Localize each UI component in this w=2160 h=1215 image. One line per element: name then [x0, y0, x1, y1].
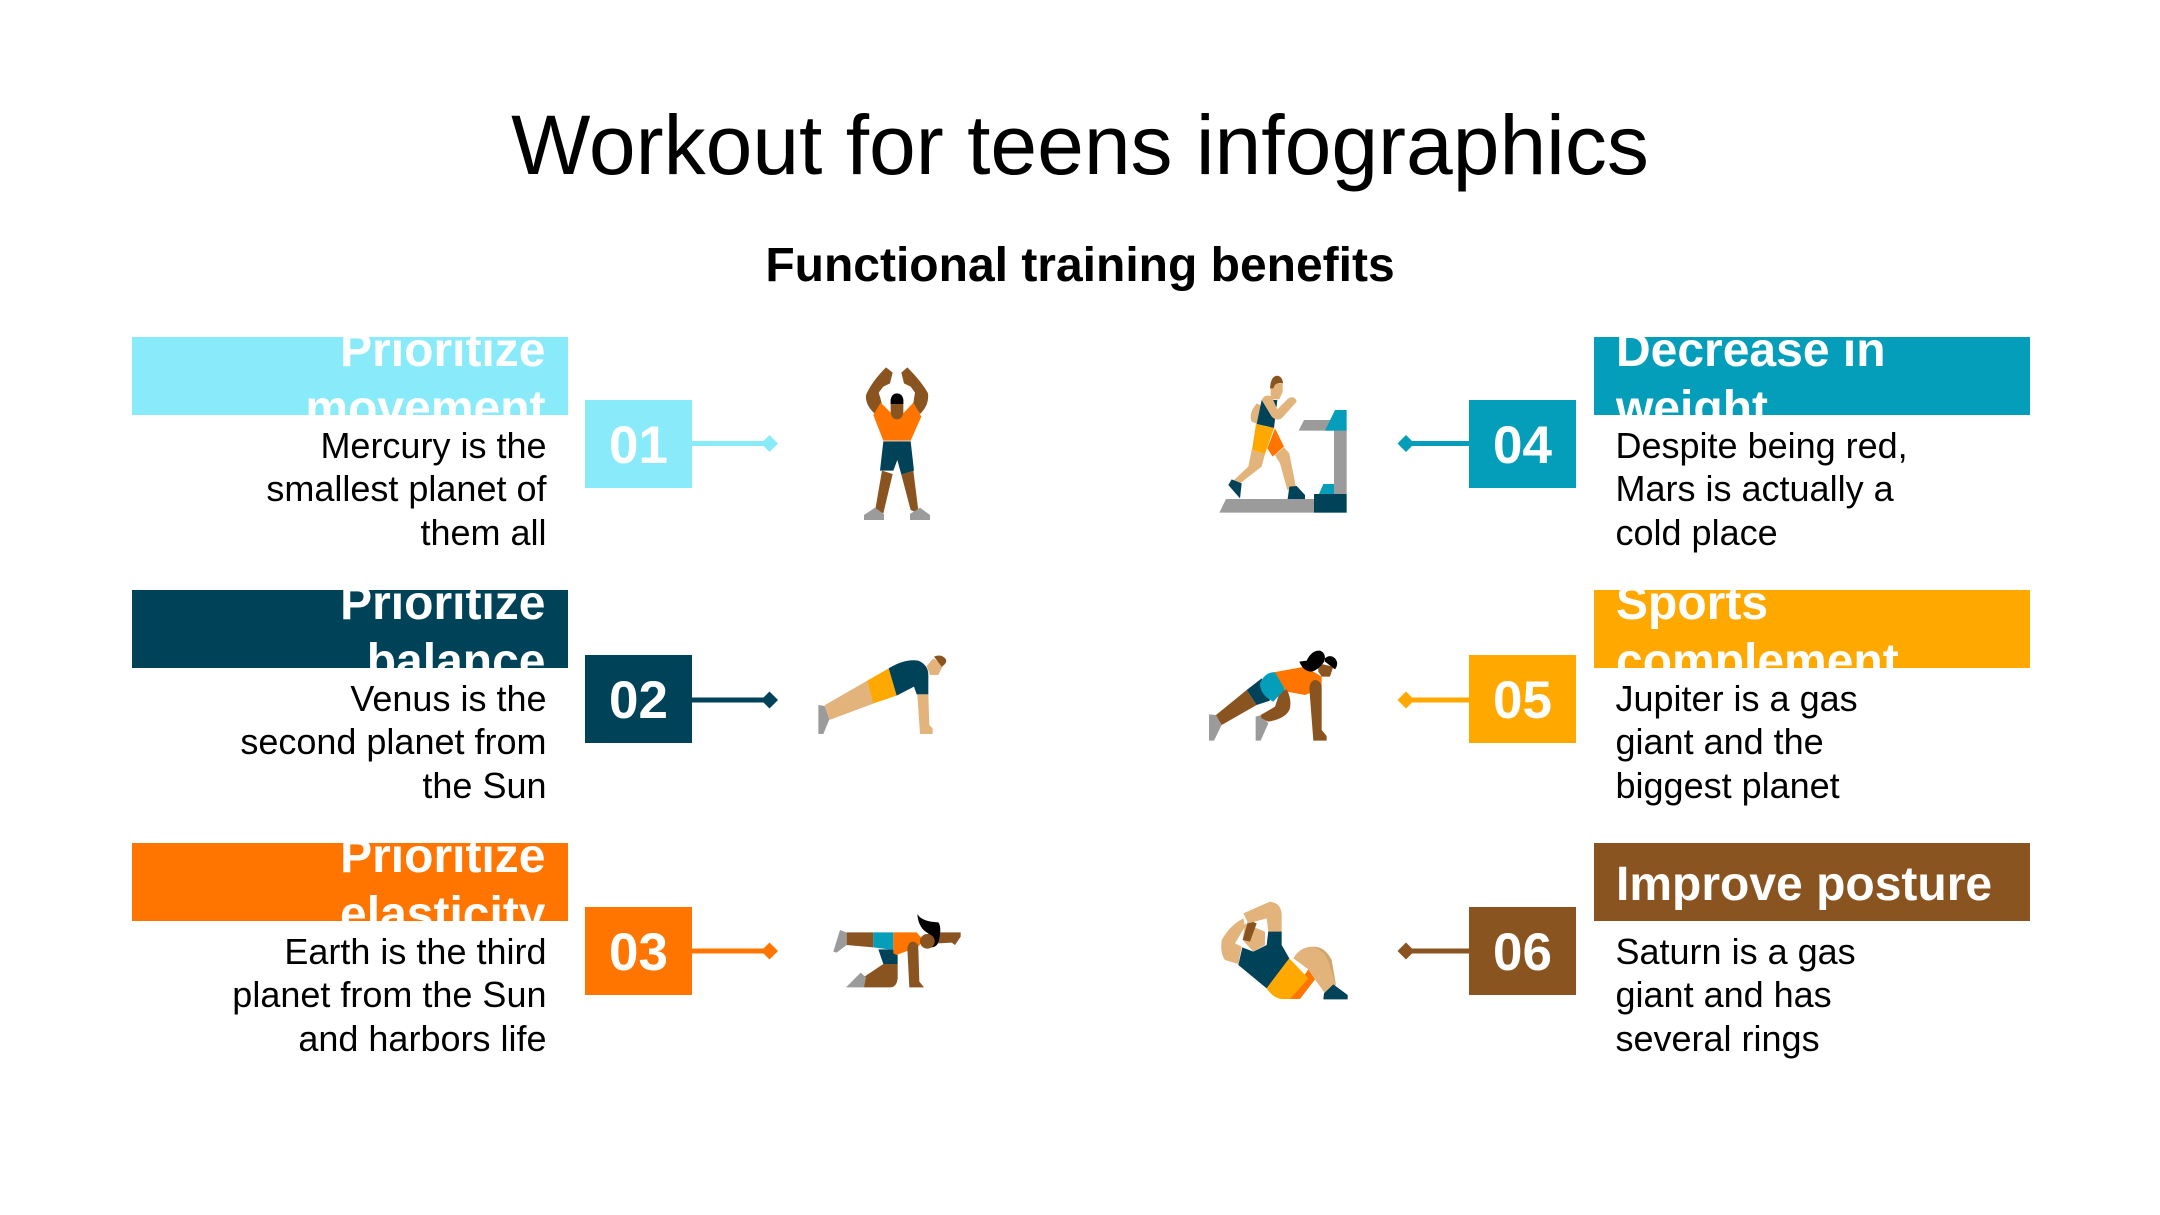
description 3: Earth is the third: [284, 931, 546, 972]
description 5: biggest planet: [1616, 765, 1840, 806]
description 3: [232, 931, 546, 1059]
heading bar 2: Prioritize balance: [132, 590, 568, 668]
icon: bird-dog figure: [833, 914, 961, 987]
description 6: several rings: [1616, 1018, 1820, 1059]
icon: treadmill runner: [1219, 376, 1347, 513]
description 5: Jupiter is a gas: [1616, 678, 1858, 719]
heading bar 1: Prioritize movement: [132, 337, 568, 415]
description 3: and harbors life: [298, 1018, 546, 1059]
number box 02: 02: [609, 671, 668, 730]
icon: mountain climber figure: [1209, 651, 1337, 741]
description 1: [266, 425, 547, 553]
icon: sit-up figure: [1221, 902, 1348, 999]
icon: plank figure: [818, 655, 946, 734]
heading bar 5: Sports complement: [1594, 590, 2030, 668]
title: Workout for teens infographics: [511, 98, 1649, 192]
description 4: Despite being red,: [1616, 425, 1908, 466]
description 4: [1616, 425, 1908, 553]
number box 04: [1469, 400, 1576, 488]
description 6: [1616, 931, 1856, 1059]
description 2: the Sun: [422, 765, 546, 806]
connector 04: [1398, 435, 1469, 452]
connector 01: [692, 435, 778, 452]
description 2: second planet from: [240, 721, 546, 762]
description 1: smallest planet of: [266, 468, 546, 509]
subtitle: Functional training benefits: [765, 238, 1395, 292]
connector 06: [1398, 942, 1469, 960]
number box 06: [1469, 907, 1576, 994]
connector 05: [1398, 692, 1469, 708]
heading bar 6: Improve posture: Improve posture: [1616, 858, 1992, 910]
description 4: Mars is actually a: [1616, 468, 1894, 509]
heading bar 4: Decrease in weight: [1594, 337, 2030, 415]
number box 01: 01: [609, 416, 668, 475]
number box 04: 04: [1493, 416, 1552, 475]
number box 06: 06: [1493, 923, 1552, 982]
heading bar 3: Prioritize elasticity: [132, 843, 568, 921]
connector 02: [692, 692, 778, 708]
description 1: Mercury is the: [320, 425, 546, 466]
description 6: giant and has: [1616, 974, 1832, 1015]
number box 01: [585, 400, 692, 488]
number box 05: [1469, 655, 1576, 742]
description 5: giant and the: [1616, 721, 1824, 762]
description 1: them all: [420, 512, 546, 553]
description 5: [1616, 678, 1858, 806]
number box 03: 03: [609, 923, 668, 982]
number box 02: [585, 655, 692, 742]
description 2: [240, 678, 546, 806]
heading bar 6: Improve posture: [1594, 843, 2030, 921]
number box 05: 05: [1493, 671, 1552, 730]
connector 03: [692, 942, 778, 960]
number box 03: [585, 907, 692, 994]
description 4: cold place: [1616, 512, 1778, 553]
description 3: planet from the Sun: [232, 974, 546, 1015]
icon: standing figure arms overhead: [864, 367, 930, 520]
description 2: Venus is the: [350, 678, 546, 719]
description 6: Saturn is a gas: [1616, 931, 1856, 972]
